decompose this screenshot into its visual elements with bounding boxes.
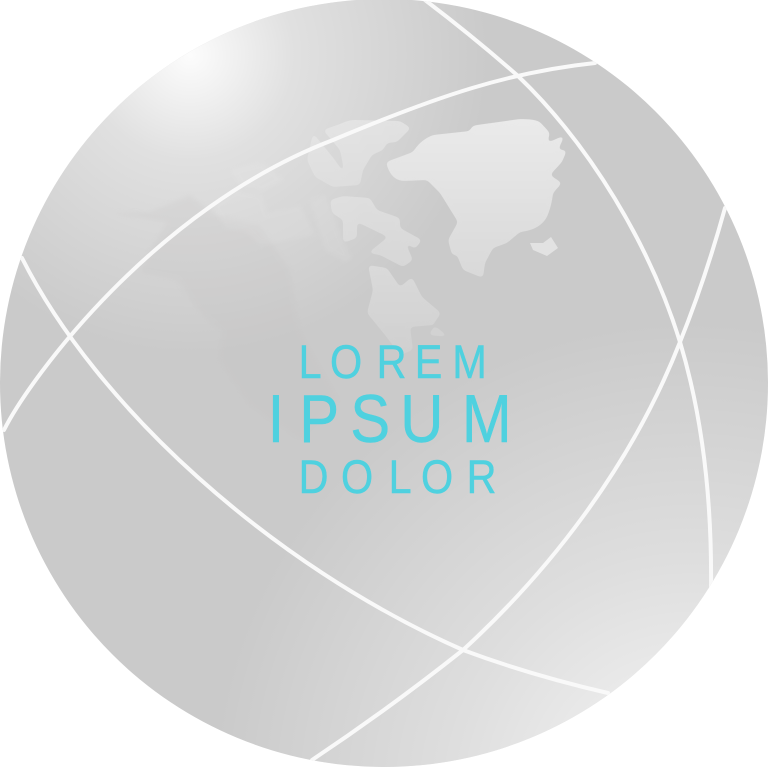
continents map [80, 119, 567, 440]
text: ipsum: IPSUM [268, 380, 512, 457]
island: Victoria [330, 196, 422, 267]
line: lower meridian [312, 208, 725, 760]
island: Baffin [307, 120, 411, 187]
island: Iceland [530, 237, 558, 256]
line: upper parallel [4, 63, 595, 430]
island: lower landmass [367, 265, 449, 355]
text: lorem: LOREM [299, 337, 487, 389]
text: dolor: DOLOR [299, 452, 497, 504]
island: Greenland [386, 119, 567, 278]
line: lower parallel [22, 258, 608, 693]
line: right meridian [425, 0, 711, 590]
mainland faint shape [80, 195, 340, 440]
title: lorem ipsum dolor [268, 337, 512, 504]
western arctic islands [212, 162, 352, 262]
